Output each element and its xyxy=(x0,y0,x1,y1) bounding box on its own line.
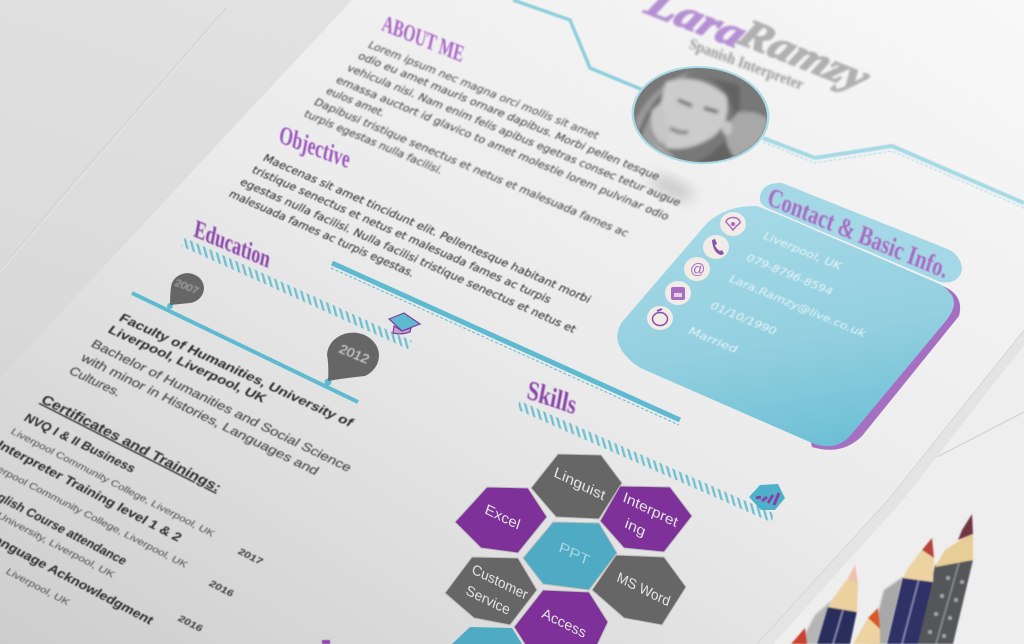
about me paragraph: emassa auctort id glavico to amet molestie lorem pulvinar odio xyxy=(333,74,672,223)
certificate list: Liverpool, UK xyxy=(3,567,72,608)
contact: location: Liverpool, UK xyxy=(760,230,845,272)
pencil: small orange xyxy=(853,608,880,644)
hexagon: Excel xyxy=(455,487,547,553)
pin: 2007: 2007 xyxy=(173,278,200,297)
pencil: grey xyxy=(918,514,973,644)
about me paragraph: turpis egestas nulla facilisi. xyxy=(301,108,446,176)
card body xyxy=(617,206,954,446)
certificate list: 2016 xyxy=(206,579,236,599)
pin: 2012: 2012 xyxy=(337,342,372,366)
certificate list: 2017 xyxy=(235,547,265,567)
heading: Education: Education xyxy=(192,215,273,274)
hexagon: Interpreting: Interpret xyxy=(621,490,680,531)
hexagon: Linguist: Linguist xyxy=(552,465,607,504)
hexagon: MS Word: MS Word xyxy=(615,570,672,610)
hexagon: PPT: PPT xyxy=(557,540,591,569)
hexagon: Linguist xyxy=(531,454,622,519)
section: Skills header xyxy=(518,374,785,518)
hatch rule xyxy=(518,405,773,518)
certificate list: 2016 xyxy=(175,614,205,634)
heading: Skills: Skills xyxy=(525,374,579,420)
heading: About Me: ABOUT ME xyxy=(380,11,466,68)
timeline axis xyxy=(132,293,358,402)
contact: phone: 079-8796-8594 xyxy=(743,252,836,298)
certificate list: Liverpool Community College, Liverpool, UK xyxy=(8,427,217,539)
hexagon: Access xyxy=(514,590,608,644)
icon: location xyxy=(720,212,746,236)
certificate list: NVQ I & II Business xyxy=(21,411,139,475)
pencil: small red xyxy=(791,628,807,644)
degree description: Bachelor of Humanities and Social Science xyxy=(88,337,355,474)
column divider xyxy=(331,263,680,425)
hexagon: partly cropped teal xyxy=(452,627,522,644)
hexagon: Interpreting xyxy=(600,486,692,552)
header divider line xyxy=(513,0,1024,208)
pin: 2012 xyxy=(324,333,379,386)
about me paragraph: odio eu amet mauris ornare dapibus. Morbi pellen tesque xyxy=(355,50,662,182)
icon: graduation cap xyxy=(389,313,420,334)
hatch rule xyxy=(183,242,410,345)
contact: marital status: Married xyxy=(685,325,740,355)
education details xyxy=(66,311,357,478)
about me paragraph: Dapibusi tristique senectus et netus et malesuada fames ac xyxy=(311,96,631,239)
profile photo xyxy=(632,66,770,164)
hexagon: PPT xyxy=(523,522,617,590)
contact: birth date: 01/10/1990 xyxy=(707,300,779,337)
timeline xyxy=(132,273,379,402)
institution: Liverpool, Liverpool, UK xyxy=(105,323,270,405)
objective paragraph: malesuada fames ac turpis egestas. xyxy=(226,187,418,279)
pin: 2007 xyxy=(167,273,204,309)
section: Education header xyxy=(183,215,420,345)
last name: Ramzy xyxy=(729,11,880,100)
degree description: Cultures. xyxy=(66,364,124,399)
icon: email xyxy=(684,257,710,281)
objective paragraph: tristique senectus et netus et malesuada fames ac turpis xyxy=(249,163,554,306)
hexagon: MS Word xyxy=(592,555,686,625)
pencil: navy right xyxy=(887,538,934,644)
certificates and trainings xyxy=(0,393,265,634)
icon: bar chart hexagon xyxy=(749,484,785,510)
icon: email: @ xyxy=(690,261,705,278)
certificate list xyxy=(0,411,265,634)
hexagon: Customer Service: Service xyxy=(464,583,512,619)
objective paragraph: egestas nulla facilisi. Nulla facilisi tristique senectus et netus et xyxy=(237,175,579,336)
about me paragraph: vehicula nisi. Nam enim felis apibus egetras consec tetur augue xyxy=(344,62,683,208)
icon: marital status xyxy=(647,306,673,330)
section: Objective xyxy=(226,121,594,336)
institution: Faculty of Humanities, University of xyxy=(116,311,357,429)
cropped heading fragment at bottom edge xyxy=(322,640,330,644)
hexagon: Interpreting: ing xyxy=(623,516,647,540)
objective paragraph: Maecenas sit amet tincidunt elit. Pellentesque habitant morbi xyxy=(260,151,594,305)
icon: calendar xyxy=(665,281,691,305)
hexagon: Excel: Excel xyxy=(483,502,522,533)
hexagon: Customer Service xyxy=(445,557,537,625)
card purple shadow xyxy=(780,282,960,450)
degree description: with minor in Histories, Languages and xyxy=(77,350,322,478)
about me paragraph: eulos amet. xyxy=(323,85,388,119)
contact: email: Lara.Ramzy@live.co.uk xyxy=(726,273,869,340)
hexagon: Access: Access xyxy=(540,606,588,642)
title tab xyxy=(760,183,962,282)
name: Lara Ramzy xyxy=(637,0,880,100)
icon: phone xyxy=(703,235,729,259)
title: Contact and Basic Info: Contact & Basic Info. xyxy=(764,182,952,284)
pencil: navy left xyxy=(817,565,858,644)
pencil shadows xyxy=(800,577,903,644)
pencils xyxy=(791,514,973,644)
about me paragraph: Lorem ipsum nec magna orci mollis sit amet xyxy=(365,39,602,142)
hexagon: Customer Service: Customer xyxy=(470,562,530,604)
chart: skills hexagons xyxy=(445,454,692,644)
job title: Spanish Interpreter xyxy=(687,34,806,94)
panel: contact card xyxy=(617,182,962,450)
subheading: Certificates and Trainings: xyxy=(38,393,224,495)
section: About Me xyxy=(301,11,683,239)
heading: Objective: Objective xyxy=(277,121,352,174)
